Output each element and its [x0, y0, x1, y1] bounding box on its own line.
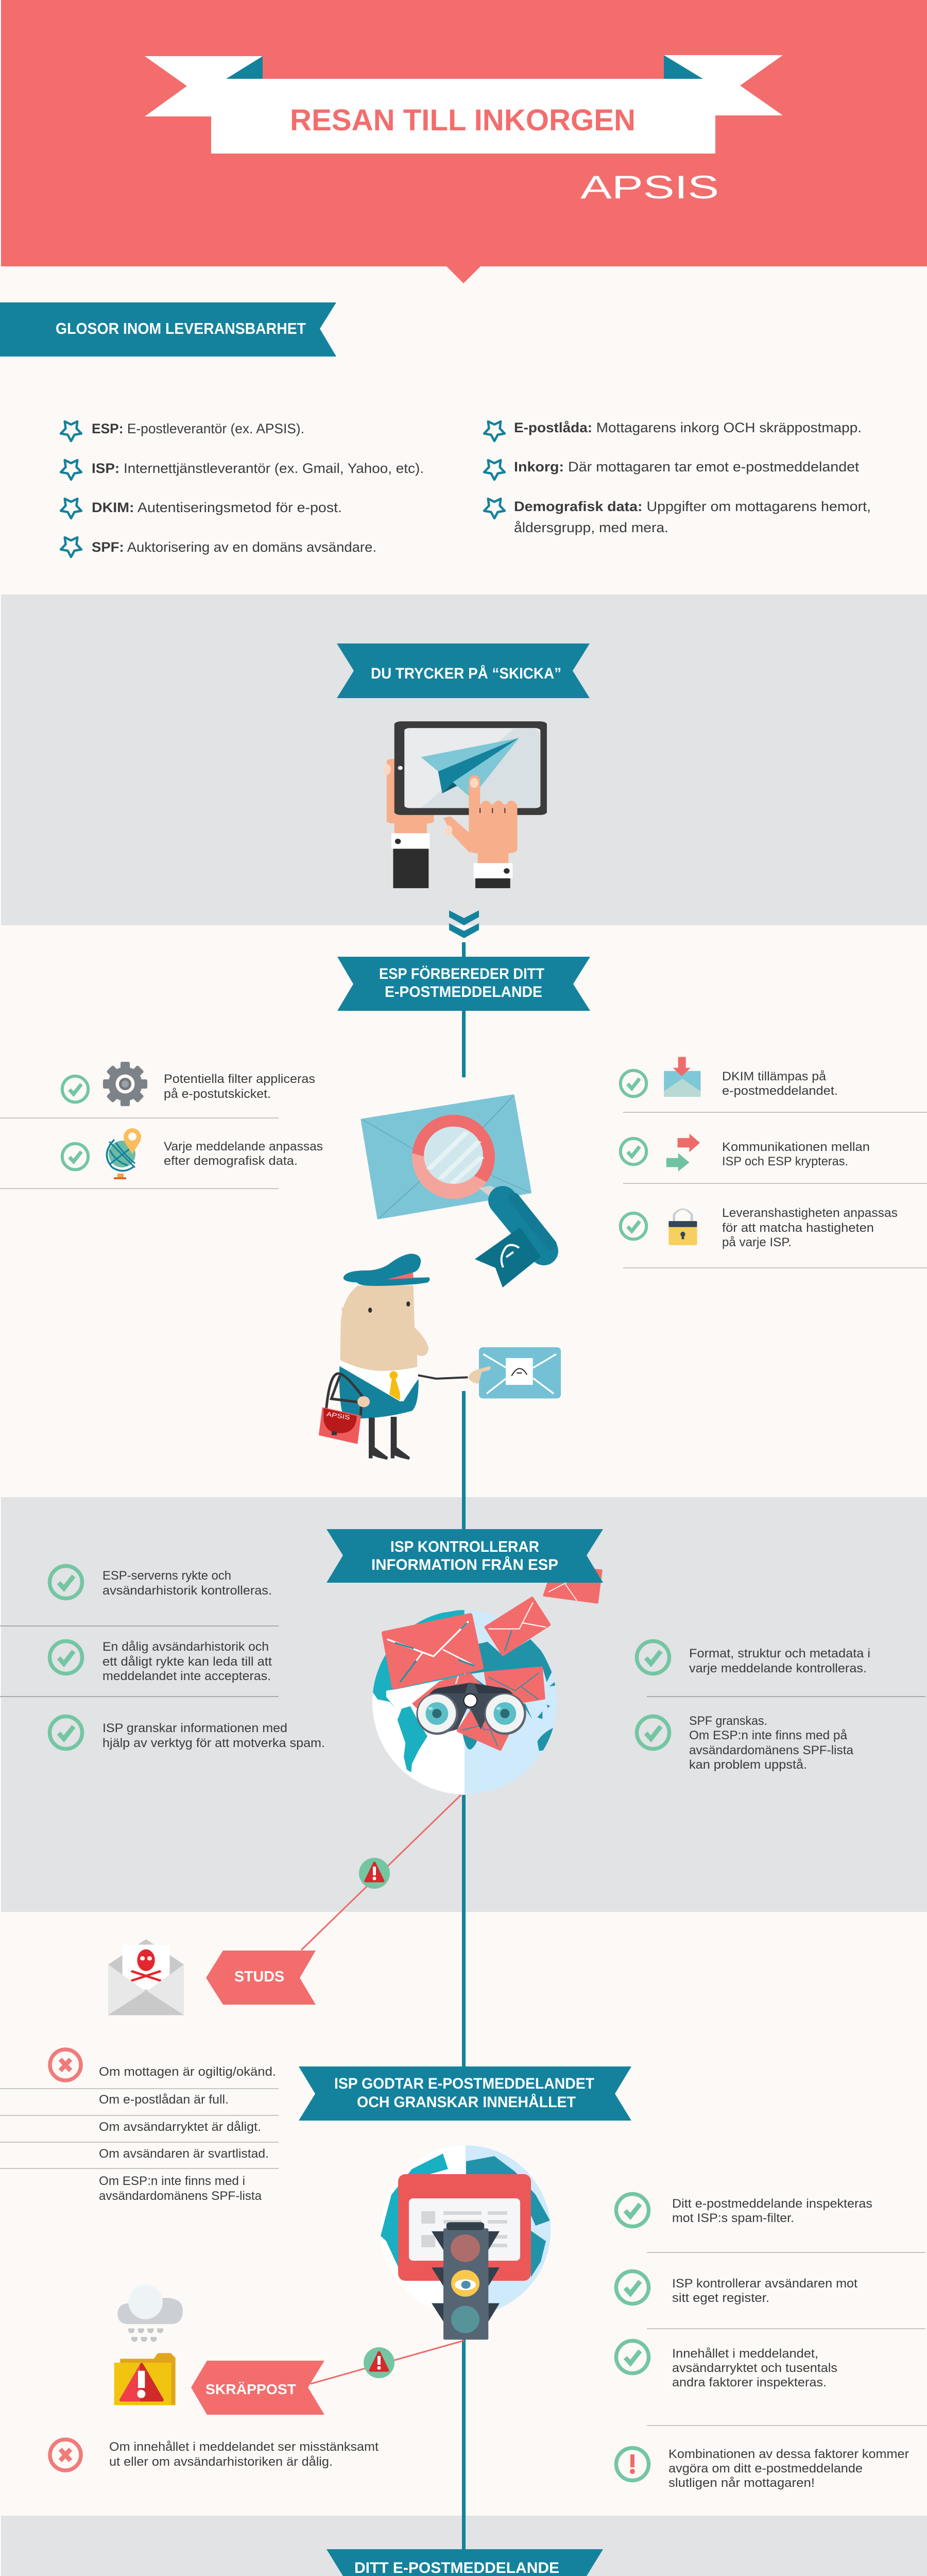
- banner: du trycker: [337, 643, 590, 698]
- item: hastighet: [621, 1206, 898, 1249]
- illustration: postman with envelope: [319, 1253, 561, 1460]
- text: spam-filter: [672, 2197, 872, 2225]
- banner: esp förbereder: ESP FÖRBEREDER DITT: [379, 965, 544, 982]
- icon: gear: [103, 1062, 147, 1106]
- list: bounce reasons: Om e-postlådan är full.: [99, 2093, 229, 2107]
- icon: padlock: [668, 1209, 697, 1245]
- text: dålig historik: meddelandet inte accepteras.: [102, 1669, 271, 1683]
- glossary terms, right column: åldersgrupp, med mera.: [514, 520, 668, 535]
- text: dkim: e-postmeddelandet.: [722, 1084, 838, 1098]
- banner: isp godtar: ISP GODTAR E-POSTMEDDELANDET: [334, 2075, 594, 2092]
- text: demografi: Varje meddelande anpassas: [164, 1140, 323, 1154]
- item: kryptering: [621, 1134, 870, 1172]
- text: kryptering: Kommunikationen mellan: [722, 1140, 870, 1154]
- text: format: [689, 1647, 870, 1675]
- glossary terms, right column: Inkorg: Där mottagaren tar emot e-postmeddelandet: [514, 459, 860, 474]
- text: verktyg: ISP granskar informationen med: [102, 1721, 287, 1735]
- text: spam-filter: mot ISP:s spam-filter.: [672, 2211, 794, 2225]
- list: bounce reasons: avsändardomänens SPF-lista: [99, 2189, 262, 2203]
- banner: skräppost: [191, 2361, 324, 2415]
- item: dkim: [621, 1057, 838, 1098]
- banner: isp godtar: OCH GRANSKAR INNEHÅLLET: [357, 2094, 576, 2111]
- item: misstänksamt: [50, 2439, 379, 2470]
- glossary terms, right column: [484, 420, 871, 535]
- text: misstänksamt: Om innehållet i meddelandet ser misstänksamt: [109, 2440, 379, 2454]
- illustration: envelope under magnifier with stamp: [362, 1095, 551, 1287]
- text: hastighet: Leveranshastigheten anpassas: [722, 1206, 898, 1220]
- item: format: [637, 1641, 870, 1675]
- glossary terms, left column: ISP: Internettjänstleverantör (ex. Gmail, Yahoo, etc).: [92, 461, 424, 476]
- icon: two arrows: [666, 1134, 700, 1172]
- glossary terms, left column: DKIM: Autentiseringsmetod för e-post.: [92, 500, 342, 515]
- text: hastighet: för att matcha hastigheten: [722, 1221, 874, 1235]
- banner: skräppost: SKRÄPPOST: [205, 2381, 296, 2397]
- icon: warning badge: [364, 2347, 394, 2378]
- text: hastighet: [722, 1206, 898, 1249]
- banner: studs: [206, 1951, 316, 2005]
- panel: isp kontrollerar: [0, 1497, 927, 2068]
- panel: isp godtar: [0, 1939, 927, 2549]
- panel: du trycker på skicka: [1, 595, 927, 925]
- illustration: globe with envelopes and binoculars: [371, 1566, 602, 1794]
- list: bounce reasons: Om avsändaren är svartlistad.: [99, 2147, 269, 2161]
- icon: warning badge: [359, 1858, 390, 1889]
- text: format: varje meddelande kontrolleras.: [689, 1662, 867, 1675]
- banner: esp förbereder: [337, 957, 590, 1011]
- glossary banner: GLOSOR INOM LEVERANSBARHET: [56, 319, 306, 337]
- text: kombination: Kombinationen av dessa faktorer kommer: [668, 2447, 909, 2461]
- illustration: globe with message card and traffic light: [381, 2145, 551, 2340]
- item: dålig historik: [49, 1640, 272, 1683]
- text: register: ISP kontrollerar avsändaren mot: [672, 2277, 857, 2291]
- text: misstänksamt: [109, 2440, 379, 2469]
- text: spf: avsändardomänens SPF-lista: [689, 1743, 853, 1757]
- text: verktyg: hjälp av verktyg för att motverka spam.: [102, 1736, 325, 1750]
- illustration: tablet and hands with paper plane: [384, 721, 547, 888]
- text: spf: [689, 1714, 853, 1772]
- text: spf: kan problem uppstå.: [689, 1758, 807, 1772]
- text: kombination: slutligen når mottagaren!: [668, 2476, 815, 2490]
- text: rykte: [102, 1569, 272, 1598]
- text: spf: Om ESP:n inte finns med på: [689, 1728, 847, 1742]
- text: filter: [164, 1072, 315, 1101]
- text: rykte: ESP-serverns rykte och: [102, 1569, 231, 1583]
- glossary terms, left column: SPF: Auktorisering av en domäns avsändare.: [92, 539, 376, 555]
- banner: isp kontrollerar: INFORMATION FRÅN ESP: [371, 1556, 558, 1573]
- glossary terms, left column: [61, 421, 424, 557]
- panel: esp förbereder: [0, 910, 927, 1499]
- text: rykte: avsändarhistorik kontrolleras.: [102, 1584, 272, 1598]
- glossary banner: [0, 302, 336, 357]
- logo: APSIS: APSIS: [580, 170, 719, 206]
- text: filter: Potentiella filter appliceras: [164, 1072, 315, 1086]
- text: kombination: avgöra om ditt e-postmeddelande: [668, 2462, 863, 2476]
- item: filter: [62, 1062, 315, 1106]
- item: kombination: [616, 2447, 909, 2490]
- text: kombination: [668, 2447, 909, 2490]
- glossary terms, right column: Demografisk data: Uppgifter om mottagarens hemort,: [514, 499, 871, 514]
- arrow: red line to skräppost: [311, 2341, 464, 2384]
- glossary terms, left column: ESP: E-postleverantör (ex. APSIS).: [92, 421, 304, 436]
- icon: envelope with skull: [108, 1939, 184, 2015]
- item: register: [616, 2271, 857, 2305]
- panel: header: [1, 0, 927, 283]
- panel: ditt e-postmeddelande når e-brevlådan: [1, 2516, 927, 2576]
- text: hastighet: på varje ISP.: [722, 1235, 792, 1249]
- item: rykte: [49, 1566, 272, 1598]
- text: register: sitt eget register.: [672, 2291, 769, 2305]
- list: bounce reasons: Om avsändarryktet är dåligt.: [99, 2120, 261, 2134]
- text: register: [672, 2277, 857, 2305]
- text: kryptering: ISP och ESP krypteras.: [722, 1155, 848, 1168]
- icon: cloud with rain: [117, 2285, 183, 2342]
- list: bounce reasons: [0, 2049, 279, 2203]
- ribbon: [145, 55, 783, 154]
- banner: du trycker: DU TRYCKER PÅ “SKICKA”: [371, 665, 561, 682]
- illustration: postman with envelope: APSIS: [326, 1410, 350, 1421]
- text: filter: på e-postutskicket.: [164, 1087, 271, 1101]
- text: demografi: [164, 1140, 323, 1168]
- list: bounce reasons: Om ESP:n inte finns med i: [99, 2174, 245, 2188]
- text: kryptering: [722, 1140, 870, 1168]
- icon: globe with pin: [107, 1128, 141, 1179]
- banner: isp kontrollerar: [327, 1529, 603, 1583]
- text: format: Format, struktur och metadata i: [689, 1647, 870, 1660]
- glossary terms, right column: E-postlåda: Mottagarens inkorg OCH skräppostmapp.: [514, 420, 862, 435]
- banner: når e-brevlådan: [327, 2549, 603, 2576]
- banner: esp förbereder: E-POSTMEDDELANDE: [385, 984, 542, 1001]
- text: dålig historik: ett dåligt rykte kan leda till att: [102, 1655, 272, 1669]
- list: bounce reasons: Om mottagen är ogiltig/okänd.: [99, 2065, 276, 2079]
- arrow: chevrons: [449, 910, 479, 938]
- text: demografi: efter demografisk data.: [164, 1154, 298, 1168]
- banner: studs: STUDS: [234, 1969, 284, 1985]
- item: verktyg: [49, 1717, 325, 1750]
- title: RESAN TILL INKORGEN: [290, 104, 636, 137]
- text: dkim: [722, 1070, 838, 1098]
- banner: isp godtar: [299, 2066, 631, 2121]
- text: spam-filter: Ditt e-postmeddelande inspekteras: [672, 2197, 872, 2211]
- text: misstänksamt: ut eller om avsändarhistoriken är dålig.: [109, 2455, 333, 2469]
- arrow: red rejection line to studs: [301, 1795, 461, 1950]
- text: dkim: DKIM tillämpas på: [722, 1070, 826, 1083]
- text: dålig historik: [102, 1640, 272, 1683]
- item: demografi: [62, 1128, 323, 1179]
- text: innehåll: andra faktorer inspekteras.: [672, 2376, 827, 2389]
- text: verktyg: [102, 1721, 325, 1750]
- item: innehåll: [616, 2341, 837, 2389]
- text: spf: SPF granskas.: [689, 1714, 767, 1728]
- text: innehåll: [672, 2347, 837, 2389]
- item: spam-filter: [616, 2194, 872, 2227]
- icon: envelope with arrow: [664, 1057, 700, 1097]
- text: innehåll: Innehållet i meddelandet,: [672, 2347, 818, 2361]
- text: innehåll: avsändarryktet och tusentals: [672, 2361, 837, 2375]
- icon: warning folder: [114, 2353, 176, 2405]
- panel: glossary: [0, 302, 871, 557]
- item: spf: [637, 1714, 853, 1772]
- text: dålig historik: En dålig avsändarhistorik och: [102, 1640, 269, 1654]
- banner: isp kontrollerar: ISP KONTROLLERAR: [390, 1538, 539, 1555]
